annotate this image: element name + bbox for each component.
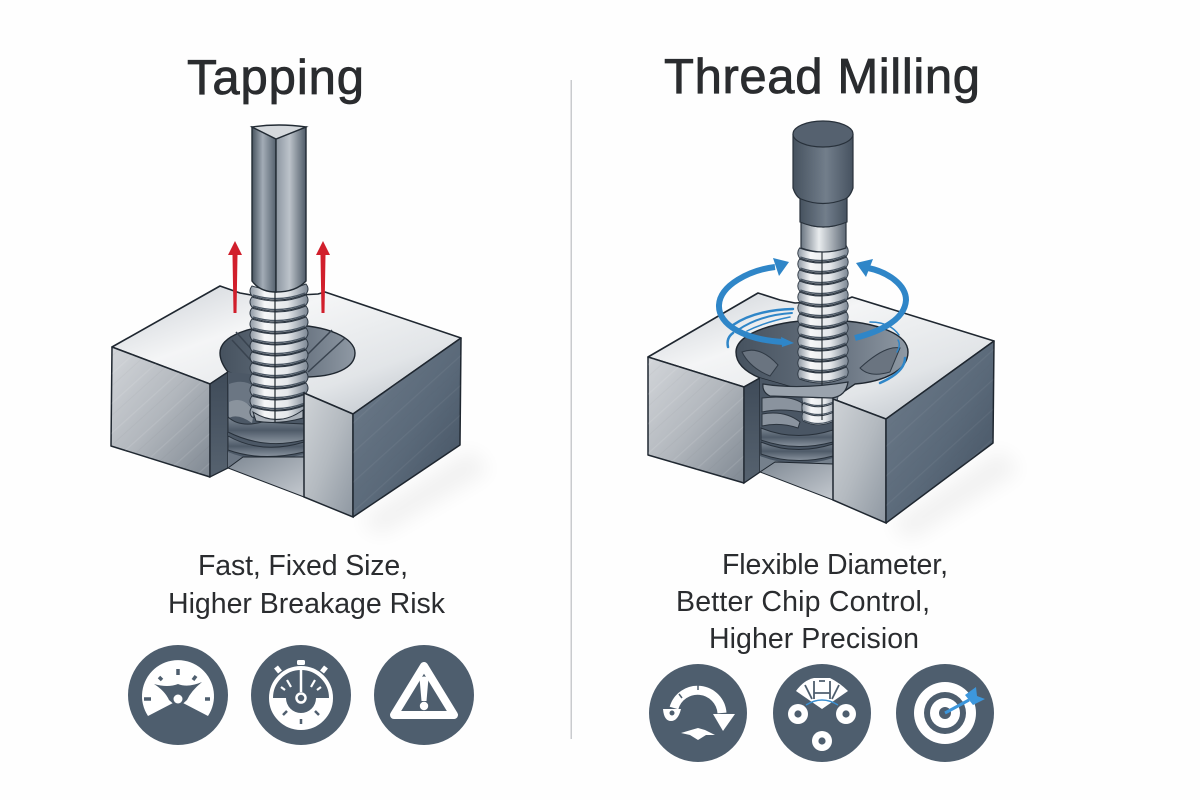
block: top face bbox=[648, 293, 994, 419]
tool: helical cut ring bbox=[763, 382, 848, 398]
blue motion streaks bbox=[728, 309, 905, 383]
tool: triangular shank bbox=[252, 125, 306, 292]
tool: threads bbox=[250, 284, 308, 422]
icon: speed gauge bbox=[128, 645, 228, 745]
title: Thread Milling: Thread Milling bbox=[664, 50, 980, 104]
block: right front section bbox=[304, 393, 353, 517]
tool: silver neck bbox=[801, 222, 846, 252]
caption: thread milling: Better Chip Control, bbox=[676, 586, 930, 618]
block: left front face bbox=[648, 357, 744, 483]
block: left front face bbox=[111, 347, 210, 477]
icon: chip control bbox=[773, 664, 871, 762]
block: top face bbox=[112, 286, 461, 414]
block: hole opening bbox=[220, 325, 355, 393]
illustration: tapping tool in cutaway block bbox=[111, 125, 490, 535]
title: Tapping: Tapping bbox=[187, 51, 364, 105]
arrow: red left bbox=[228, 241, 242, 313]
illustration: thread milling tool in cutaway block bbox=[648, 121, 1020, 540]
block: notch interior with rings bbox=[760, 378, 833, 500]
block shadow bbox=[890, 450, 1020, 540]
icon: warning triangle bbox=[374, 645, 474, 745]
caption: tapping: Fast, Fixed Size, bbox=[198, 550, 408, 582]
icon: stopwatch bbox=[251, 645, 351, 745]
block: notch side wall bbox=[744, 378, 760, 483]
tool: collar bbox=[800, 196, 847, 227]
arrow: blue rotation right bbox=[855, 259, 906, 338]
tool: lower threads bbox=[802, 392, 838, 425]
block: right side face bbox=[886, 341, 994, 523]
icon: adjustable rotation bbox=[649, 664, 747, 762]
block: hole opening bbox=[736, 320, 908, 399]
center divider bbox=[570, 80, 572, 739]
block: notch side wall bbox=[210, 372, 228, 477]
block: notch interior with rings bbox=[228, 372, 304, 497]
caption: tapping: Higher Breakage Risk bbox=[168, 588, 446, 620]
caption: thread milling: Flexible Diameter, bbox=[722, 549, 948, 581]
tool: cylindrical cap bbox=[793, 121, 853, 204]
tool: upper threads bbox=[798, 225, 848, 420]
caption: thread milling bbox=[676, 549, 948, 655]
caption: tapping bbox=[168, 550, 446, 620]
caption: thread milling: Higher Precision bbox=[709, 623, 919, 655]
arrow: red right bbox=[316, 241, 330, 313]
block shadow bbox=[360, 450, 490, 535]
block: right front section bbox=[833, 399, 886, 523]
icon: precision target bbox=[896, 664, 994, 762]
block: right side face bbox=[353, 338, 461, 517]
arrow: blue rotation left bbox=[719, 258, 794, 347]
